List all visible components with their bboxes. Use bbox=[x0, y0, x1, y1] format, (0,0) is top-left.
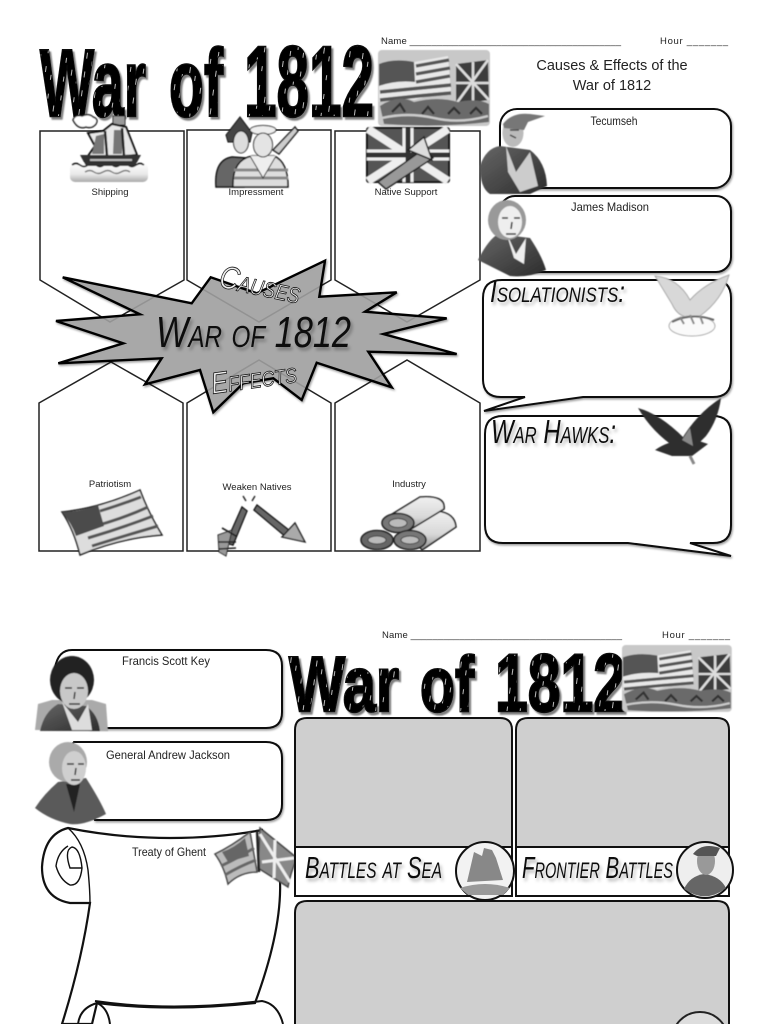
card: Francis Scott Key: Francis Scott Key bbox=[122, 654, 210, 668]
icon: broken arrow bbox=[218, 496, 305, 556]
icon: crossed flags bbox=[215, 828, 297, 887]
labels: cause and effect topics: Industry bbox=[392, 479, 426, 490]
card: James Madison bbox=[478, 196, 731, 276]
icon: ship in circle bbox=[456, 842, 514, 900]
panel: effect arrow boxes bbox=[39, 360, 480, 551]
title: War of 1812: 1812 bbox=[244, 26, 374, 138]
icon: sailing ship bbox=[70, 115, 148, 182]
labels: cause and effect topics bbox=[89, 187, 438, 493]
panel: impressment bbox=[187, 130, 331, 322]
icon: dove with olive branch bbox=[655, 275, 729, 336]
scroll: Treaty of Ghent bbox=[42, 828, 297, 1024]
title: War of 1812 (page 2): of bbox=[420, 640, 475, 728]
scroll bottom roll bbox=[78, 1001, 283, 1024]
panel: native support bbox=[335, 131, 480, 322]
panel: battles at sea: Battles at Sea bbox=[305, 850, 442, 885]
speech bubble: war hawks bbox=[485, 398, 731, 556]
card: General Andrew Jackson bbox=[35, 742, 282, 824]
scroll: Treaty of Ghent: Treaty of Ghent bbox=[132, 845, 207, 859]
panel: frontier battles bbox=[516, 718, 733, 898]
panel: battles at sea bbox=[295, 718, 514, 900]
labels: cause and effect topics: Shipping bbox=[92, 187, 128, 198]
card: General Andrew Jackson: General Andrew Jackson bbox=[106, 748, 230, 762]
image: flags over battle scene bbox=[378, 50, 490, 126]
notes area bbox=[295, 718, 512, 847]
panel: weaken natives bbox=[187, 360, 331, 551]
labels: cause and effect topics: Impressment bbox=[229, 187, 284, 198]
subtitle: causes and effects: War of 1812 bbox=[573, 78, 651, 94]
portrait: General Andrew Jackson bbox=[35, 742, 106, 824]
heading: effects: Effects bbox=[209, 356, 299, 401]
icon: union flag with arrow bbox=[367, 128, 449, 189]
title: War of 1812: War bbox=[40, 30, 146, 137]
labels: cause and effect topics: Native Support bbox=[375, 187, 438, 198]
page 1 name and hour fields bbox=[381, 36, 729, 47]
subtitle: causes and effects bbox=[536, 58, 688, 94]
portrait: Francis Scott Key bbox=[35, 656, 108, 731]
heading strip bbox=[295, 847, 512, 896]
portrait: Tecumseh bbox=[480, 114, 547, 194]
title: War of 1812 (page 2): 1812 bbox=[495, 638, 626, 729]
panel: frontier battles: Frontier Battles bbox=[522, 850, 673, 885]
portrait: James Madison bbox=[478, 200, 546, 276]
title: War of 1812 bbox=[40, 26, 374, 138]
page 2 name and hour fields bbox=[382, 630, 731, 641]
icon: hawk bbox=[638, 398, 721, 464]
panel: shipping bbox=[40, 131, 184, 322]
panel: patriotism bbox=[39, 362, 183, 551]
card: Tecumseh bbox=[480, 109, 731, 194]
image: flags over battle scene (page 2) bbox=[622, 645, 732, 712]
labels: cause and effect topics: Weaken Natives bbox=[222, 482, 292, 493]
icon: american flag bbox=[62, 490, 162, 555]
card: Tecumseh: Tecumseh bbox=[590, 114, 638, 128]
icon: partial circle bbox=[672, 1012, 728, 1024]
panel: bottom notes area bbox=[295, 901, 729, 1024]
title: War of 1812 (page 2) bbox=[289, 638, 626, 729]
scroll curl bbox=[56, 828, 90, 903]
starburst: War of 1812 bbox=[56, 258, 457, 412]
subtitle: causes and effects: Causes & Effects of the bbox=[536, 58, 688, 74]
card: James Madison: James Madison bbox=[571, 200, 649, 214]
title: War of 1812 (page 2): War bbox=[289, 640, 399, 728]
page 1 name and hour fields: Name _______________________________________ bbox=[381, 36, 622, 47]
title: War of 1812: of bbox=[169, 30, 224, 137]
labels: cause and effect topics: Patriotism bbox=[89, 479, 131, 490]
panel: cause arrow boxes bbox=[40, 130, 480, 322]
page 1 name and hour fields: Hour _______ bbox=[660, 36, 729, 47]
speech bubble: war hawks: War Hawks: bbox=[491, 413, 616, 450]
page 2 name and hour fields: Hour _______ bbox=[662, 630, 731, 641]
icon: portrait in circle bbox=[677, 842, 733, 898]
speech bubble: isolationists: Isolationists: bbox=[490, 276, 625, 309]
page 2 name and hour fields: Name _______________________________________ bbox=[382, 630, 623, 641]
heading: war of 1812: War of 1812 bbox=[156, 308, 351, 357]
heading strip bbox=[516, 847, 729, 896]
notes area bbox=[516, 718, 729, 847]
icon: rolled material bbox=[361, 497, 456, 550]
card: Francis Scott Key bbox=[35, 650, 282, 731]
speech bubble: isolationists bbox=[483, 275, 731, 411]
heading: causes: Causes bbox=[216, 258, 304, 311]
icon: impressed sailors bbox=[216, 117, 298, 187]
panel: industry bbox=[335, 360, 480, 551]
